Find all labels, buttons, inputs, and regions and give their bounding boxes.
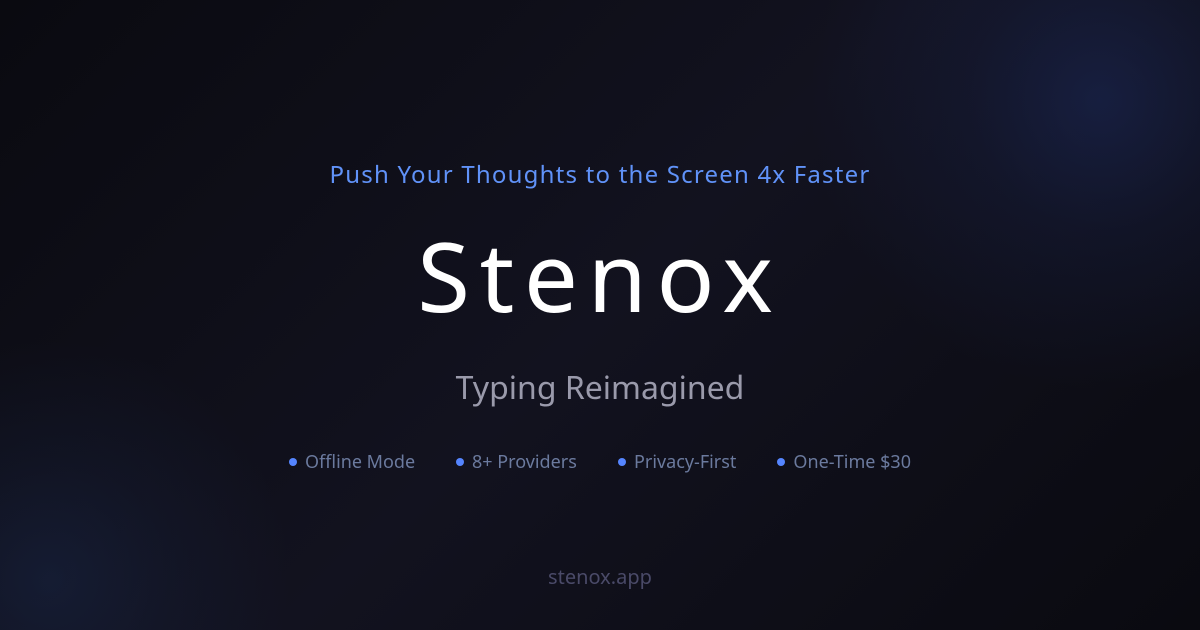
feature: providers — [456, 450, 577, 474]
subtitle: Typing Reimagined — [456, 366, 744, 409]
feature: offline mode — [289, 450, 415, 474]
feature list — [289, 450, 911, 474]
feature list: 8+ Providers — [472, 450, 577, 474]
feature: price — [777, 450, 911, 474]
feature: privacy — [618, 450, 736, 474]
site url: stenox.app — [548, 563, 652, 590]
feature list: Privacy-First — [634, 450, 736, 474]
tagline: Push Your Thoughts to the Screen 4x Faster — [330, 158, 870, 191]
title: Stenox — [417, 210, 783, 341]
feature list: One-Time $30 — [793, 450, 911, 474]
feature list: Offline Mode — [305, 450, 415, 474]
